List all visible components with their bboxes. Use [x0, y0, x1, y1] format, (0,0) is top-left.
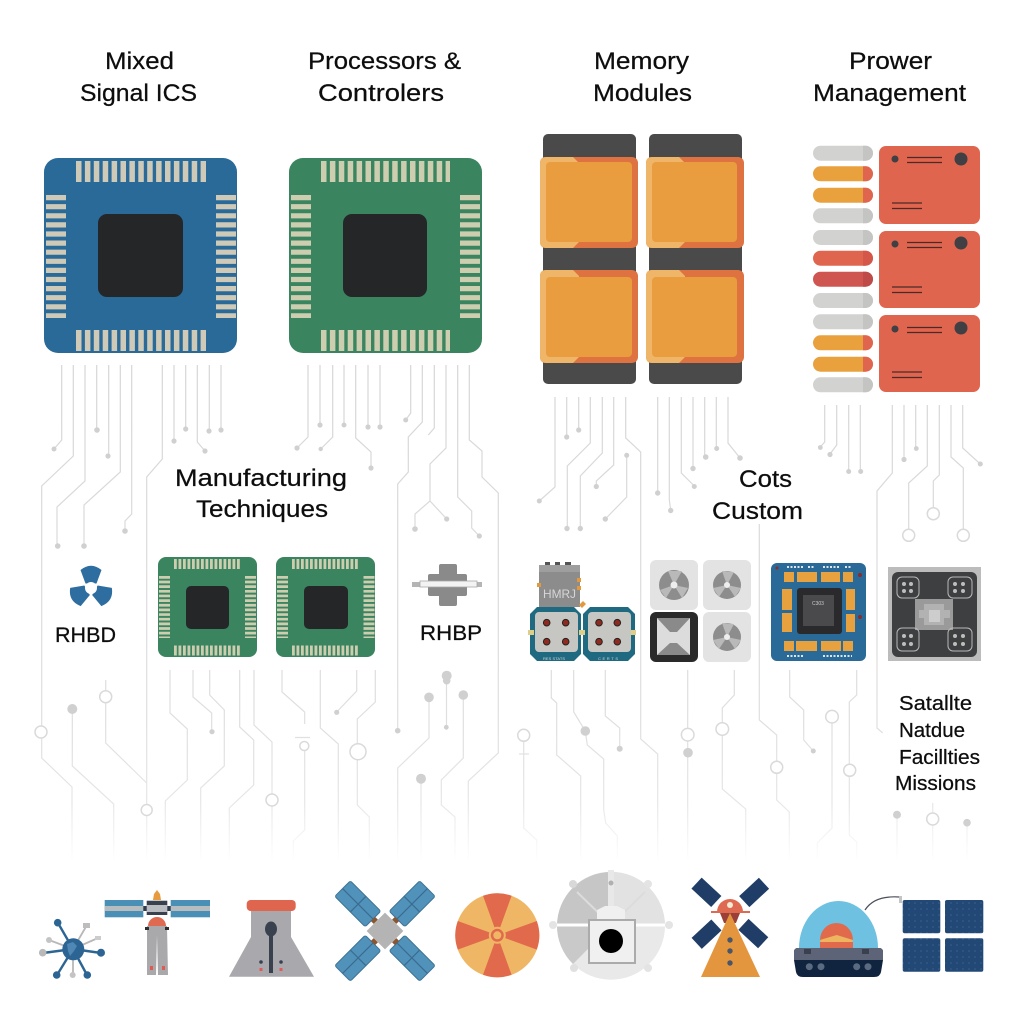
- icon: grey radar dish: [549, 870, 673, 980]
- heading: Manufacturing Techniques: [175, 465, 347, 523]
- label: RHBD: RHBD: [55, 624, 116, 647]
- icon: HDMI connector board: CERTS: [598, 656, 618, 661]
- icon: RHBP: [412, 564, 482, 606]
- heading: Mixed Signal ICS: [80, 48, 197, 107]
- heading: Mixed Signal ICS: Signal ICS: [80, 80, 197, 107]
- icon: x-wing solar panels: [300, 846, 470, 1016]
- icon: HDMI connector board: RES STATS: [543, 656, 565, 661]
- heading: Cots Custom: Custom: [712, 498, 803, 525]
- list: mission labels: Natdue: [899, 720, 965, 742]
- heading: Prower Management: Prower: [849, 48, 932, 75]
- list: mission labels: [895, 693, 980, 795]
- power management pills: [813, 146, 873, 392]
- small chip right: [276, 557, 375, 657]
- list: mission labels: Facillties: [899, 747, 980, 769]
- small chip left: [158, 557, 257, 657]
- icon: tower: [229, 900, 314, 977]
- icon: HDMI connector board: HMRJ: [543, 587, 576, 601]
- icon: blue custom board: [771, 563, 866, 661]
- icon: network globe: [39, 919, 105, 979]
- heading: Memory Modules: Modules: [593, 80, 692, 107]
- heading: Memory Modules: [593, 48, 692, 107]
- heading: Processors & Controlers: [308, 48, 461, 107]
- heading: Memory Modules: Memory: [594, 48, 689, 75]
- heading: Prower Management: [813, 48, 966, 107]
- trace ring nodes: [35, 508, 969, 825]
- label: RHBP: RHBP: [420, 622, 482, 645]
- icon: HDMI connector board: [528, 562, 636, 661]
- heading: Processors & Controlers: Controlers: [318, 80, 444, 107]
- icon: grey disc tiles: [650, 560, 751, 662]
- icon: blue custom board: C303: [812, 601, 824, 607]
- trace end dots: [52, 418, 983, 826]
- heading: Processors & Controlers: Processors &: [308, 48, 461, 75]
- chip: mixed signal: [44, 158, 237, 353]
- heading: Manufacturing Techniques: Techniques: [196, 496, 328, 523]
- heading: Cots Custom: Cots: [739, 466, 792, 493]
- memory modules: [540, 134, 744, 384]
- circuit traces: [42, 365, 980, 860]
- icon: pie wheel: [455, 893, 539, 977]
- icon: RHBD radiation: [66, 566, 116, 608]
- heading: Cots Custom: [712, 466, 803, 525]
- power management cards: [879, 146, 980, 392]
- icon: grey package: [888, 567, 981, 661]
- icon: satellite on mast: [105, 890, 210, 975]
- chip: processors: [289, 158, 482, 353]
- icon: dome vehicle and solar array: [794, 896, 983, 977]
- list: mission labels: Missions: [895, 773, 976, 795]
- heading: Prower Management: Management: [813, 80, 966, 107]
- icon: windmill: [691, 878, 769, 977]
- list: mission labels: Satallte: [899, 693, 972, 715]
- heading: Mixed Signal ICS: Mixed: [105, 48, 174, 75]
- heading: Manufacturing Techniques: Manufacturing: [175, 465, 347, 492]
